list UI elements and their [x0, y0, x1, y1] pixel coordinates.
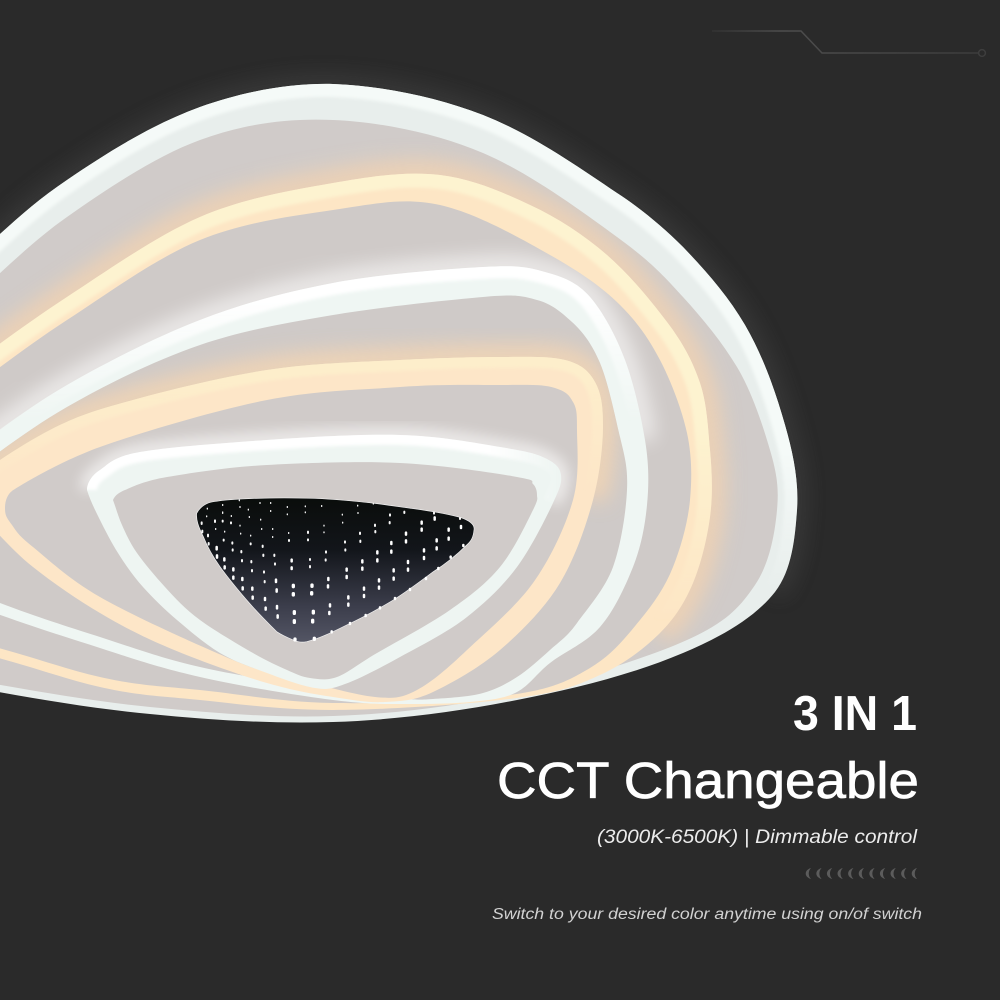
outer warm ring	[0, 174, 712, 710]
heading: CCT Changeable: CCT Changeable	[497, 752, 919, 809]
dark infinity mirror panel	[197, 498, 474, 642]
subheading: colour range and dimming: (3000K-6500K) | Dimmable control	[597, 827, 918, 848]
white glow around middle ring	[0, 266, 645, 458]
inner gray panel	[5, 385, 578, 698]
outer gray panel	[0, 120, 778, 716]
outer warm ring highlight	[0, 174, 712, 503]
innermost ring highlight	[87, 434, 525, 490]
warm glow around outer warm ring	[0, 174, 712, 633]
outer white ring	[0, 84, 797, 723]
inner warm ring highlight	[136, 357, 599, 400]
heading: 3 IN 1: 3 IN 1	[793, 687, 917, 741]
caption: switching note: Switch to your desired color anytime using on/of switch	[492, 906, 922, 923]
decorative circuit line with end node	[712, 31, 985, 56]
middle white ring	[0, 266, 648, 704]
second gray panel	[0, 201, 691, 703]
mirror LED dots: extra large	[293, 585, 314, 640]
outer ring highlight	[0, 84, 797, 592]
icon: row of chevrons	[806, 868, 917, 879]
ceiling lamp	[0, 84, 797, 723]
inner warm ring	[0, 357, 603, 702]
innermost white ring	[87, 435, 561, 689]
warm glow around inner warm ring	[0, 357, 603, 500]
mirror LED dots: small	[207, 500, 373, 537]
centre gray panel	[113, 462, 537, 679]
white glow around innermost ring	[87, 435, 561, 503]
lamp halo on dark background	[0, 84, 797, 592]
mirror LED dots: medium	[202, 512, 460, 582]
third gray panel	[0, 296, 627, 700]
mirror LED dots: large	[217, 517, 463, 632]
middle ring highlight	[125, 266, 622, 356]
